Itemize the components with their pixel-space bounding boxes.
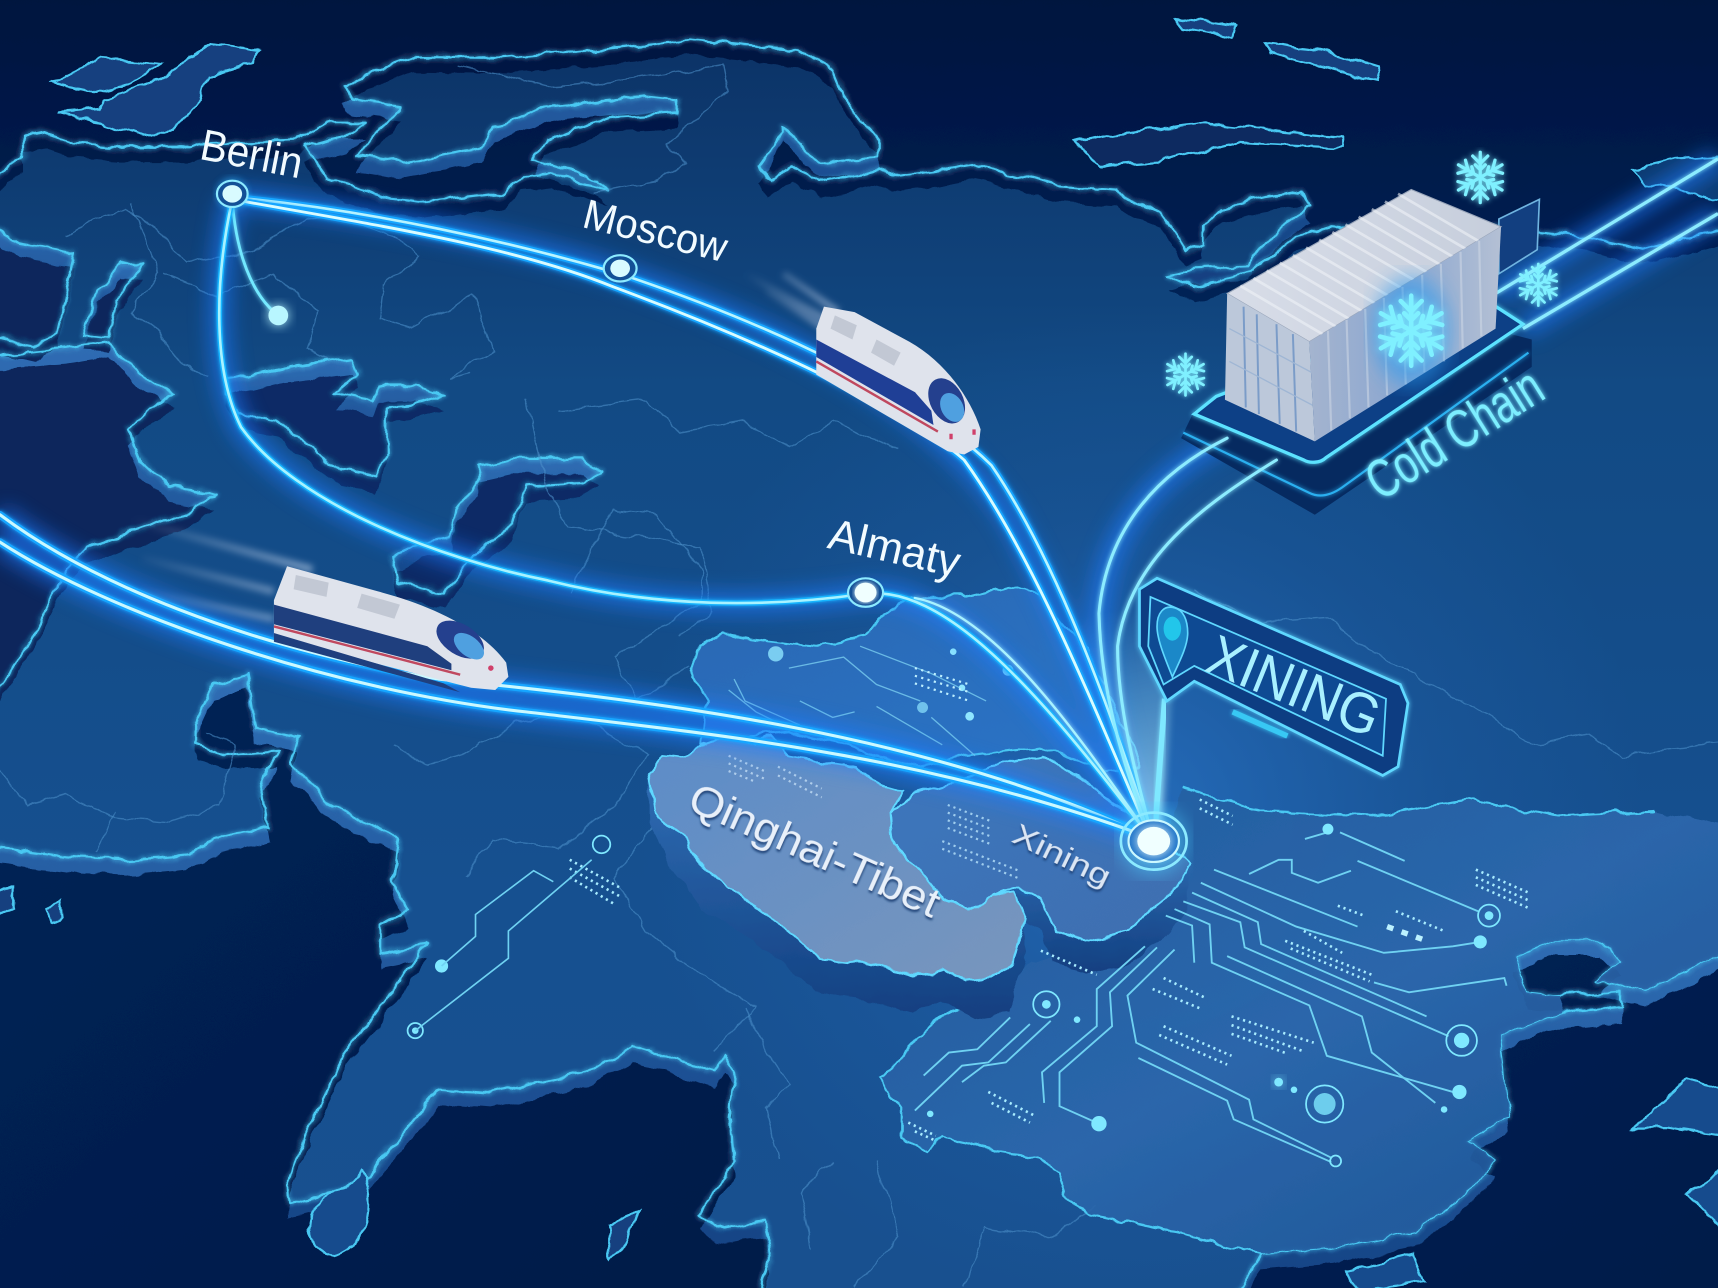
flake glow on container	[1372, 276, 1451, 386]
hub light beam	[1079, 613, 1178, 841]
icon: location pin	[1157, 607, 1188, 677]
city node: Berlin	[216, 177, 249, 210]
label: Almaty: Almaty	[824, 510, 965, 587]
Xinjiang surface	[690, 586, 1139, 772]
under-skirt	[274, 633, 460, 692]
upper glowing frame	[1194, 296, 1523, 462]
sign pole	[1155, 699, 1165, 832]
top ribs	[1240, 194, 1480, 334]
window band	[816, 340, 934, 425]
Tibet data dots	[729, 756, 822, 797]
hub core	[1137, 827, 1170, 855]
nose lights	[488, 665, 494, 671]
Qinghai data dots	[942, 805, 1019, 878]
route glow underlay	[0, 159, 1718, 838]
hub rings	[1121, 813, 1187, 870]
sign accent	[1233, 712, 1287, 736]
train: northern route	[745, 274, 981, 455]
windshield	[430, 613, 491, 667]
city node: branch endpoint	[268, 306, 288, 325]
Tibet side wall	[649, 775, 1024, 1019]
circuit pattern across eastern China	[915, 831, 1507, 1162]
route: cold chain feeders	[1099, 438, 1276, 838]
route: Berlin branch	[232, 199, 278, 315]
container platform	[1181, 296, 1532, 515]
rear panel	[1499, 199, 1539, 274]
route: southern corridor	[0, 515, 1150, 838]
train: southern route	[131, 520, 508, 692]
circuit data dots	[570, 800, 1528, 1141]
motion streaks	[131, 520, 312, 619]
label: Berlin: Berlin	[196, 121, 307, 188]
panel: Qinghai region	[890, 756, 1189, 973]
route: Berlin to Moscow to Xining	[232, 197, 1153, 838]
city node: Almaty	[848, 578, 883, 607]
icon: snowflake on container	[1376, 296, 1447, 366]
refrigerated container	[1225, 189, 1539, 441]
red stripe	[274, 626, 460, 675]
hub glow	[1121, 808, 1187, 874]
lower slab	[1181, 307, 1532, 515]
icon: snowflake right	[1517, 264, 1559, 306]
red stripe	[816, 361, 938, 432]
label: Cold Chain: Cold Chain	[1354, 355, 1554, 512]
roof units	[831, 315, 901, 366]
panel: Xinjiang region	[690, 586, 1139, 772]
container long side	[1309, 227, 1501, 441]
city node: Moscow	[604, 255, 637, 281]
hub node: Xining	[1121, 808, 1187, 874]
China top surface	[880, 789, 1718, 1254]
Tibet surface	[649, 736, 1024, 980]
label: Qinghai-Tibet: Qinghai-Tibet	[682, 774, 948, 926]
inner frame	[1148, 597, 1386, 756]
icon: snowflake left	[1164, 354, 1207, 395]
panel: Tibet region	[649, 736, 1024, 1019]
train body	[816, 307, 981, 455]
route: Berlin to Almaty to Xining	[219, 199, 1150, 838]
window band	[274, 605, 451, 670]
circuit nodes	[408, 824, 1500, 1166]
Xinjiang circuit details	[729, 646, 986, 756]
sign text: XINING	[1198, 623, 1390, 750]
India circuit traces	[415, 860, 592, 1031]
icon: snowflake top	[1455, 152, 1506, 203]
Qinghai surface	[890, 756, 1189, 942]
roof units	[294, 575, 400, 619]
XINING sign	[1139, 578, 1408, 832]
motion streaks	[745, 274, 838, 334]
label: Xining: Xining	[1007, 818, 1116, 894]
nose lights	[951, 429, 974, 439]
China border glow	[880, 789, 1654, 1254]
label: Moscow: Moscow	[579, 190, 733, 271]
container door side	[1225, 294, 1315, 441]
sign plate	[1139, 578, 1408, 775]
train body	[274, 566, 508, 690]
panel: China mainland slab	[880, 789, 1718, 1254]
route: north-east lines	[1496, 159, 1718, 329]
container top	[1227, 189, 1501, 342]
windshield	[921, 372, 972, 430]
Qinghai side wall	[893, 843, 1189, 973]
